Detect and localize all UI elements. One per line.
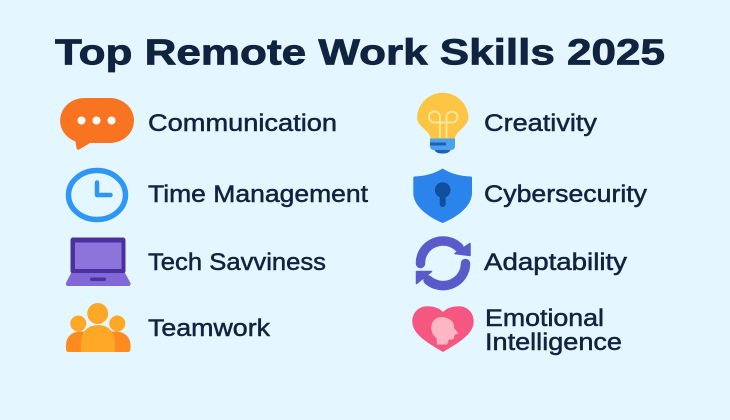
label: Emotional Intelligence [485, 305, 622, 356]
icon: blue clock [68, 170, 126, 220]
label: Cybersecurity: Cybersecurity [484, 181, 647, 208]
label: Creativity: Creativity [484, 110, 597, 137]
label: Tech Savviness: Tech Savviness [148, 249, 326, 276]
skill: tech savviness [66, 238, 326, 286]
icon: three people [66, 303, 130, 352]
skill: creativity [417, 93, 597, 154]
label: Communication: Communication [148, 110, 337, 137]
skill: time management [68, 170, 368, 220]
icon: circular arrows [416, 241, 470, 286]
label: Adaptability: Adaptability [484, 249, 627, 276]
icon: blue shield with keyhole [413, 168, 472, 223]
skill: emotional intelligence [412, 305, 622, 356]
icon: orange speech bubble [60, 98, 134, 150]
label: Emotional Intelligence: Emotional [485, 305, 604, 332]
label: Emotional Intelligence: Intelligence [485, 329, 622, 356]
icon: light bulb [417, 93, 468, 154]
skill: communication [60, 98, 337, 150]
label: Time Management: Time Management [148, 181, 368, 208]
skill: teamwork [66, 303, 271, 352]
skill: cybersecurity [413, 168, 647, 223]
label: Teamwork: Teamwork [148, 315, 271, 342]
skill: adaptability [416, 241, 627, 286]
icon: purple laptop [66, 238, 131, 286]
icon: heart with head [412, 306, 474, 352]
title: Top Remote Work Skills 2025 [55, 32, 665, 72]
